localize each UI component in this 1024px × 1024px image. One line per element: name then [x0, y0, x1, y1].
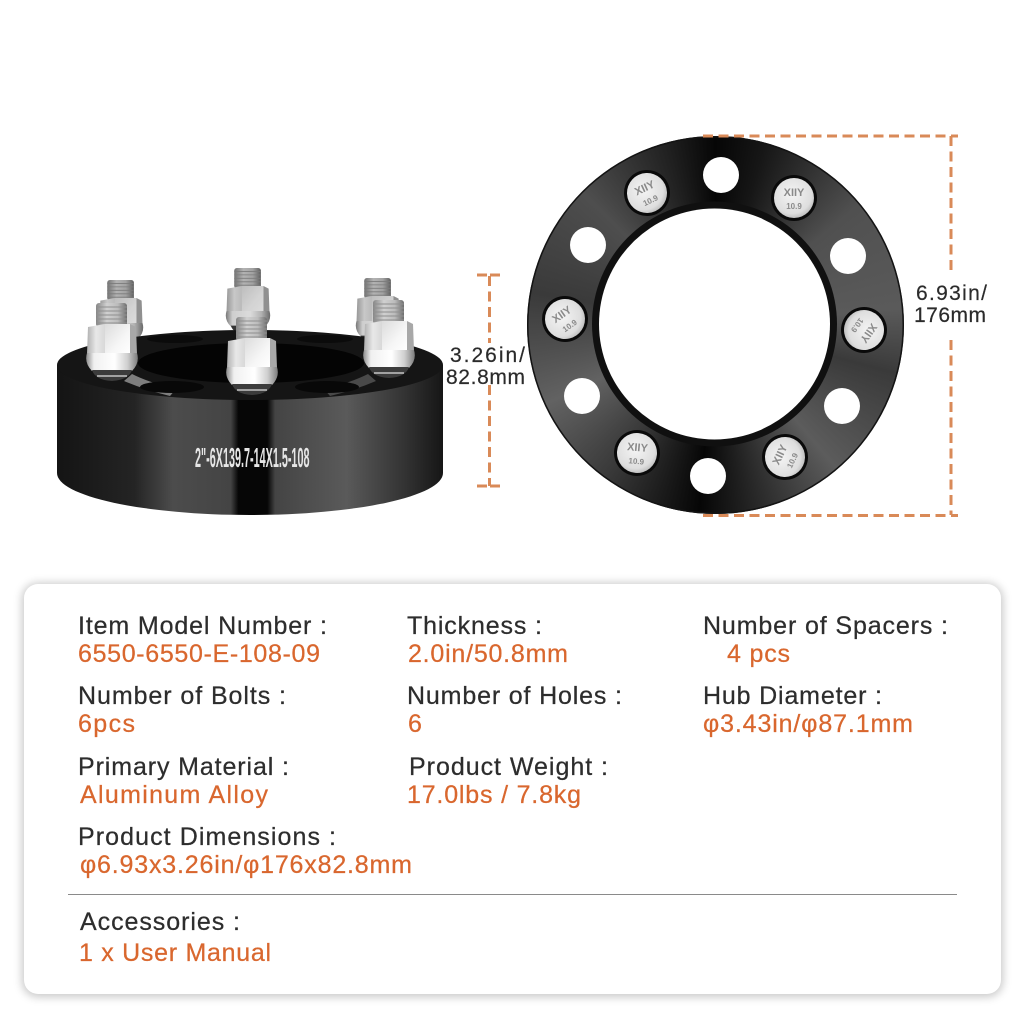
bolts seen from the rear: XIIY	[633, 178, 657, 198]
bolts seen from the rear: 10.9	[849, 316, 865, 335]
spec: number of bolts	[78, 682, 286, 738]
bolts seen from the rear: 10.9	[642, 193, 660, 208]
spec: product weight: 17.0lbs / 7.8kg	[407, 781, 581, 809]
spec: product dimensions	[78, 823, 412, 879]
spec: accessories: 1 x User Manual	[79, 939, 271, 967]
spec: primary material	[78, 753, 289, 809]
bolts seen from the rear: 10.9	[628, 456, 645, 467]
spec: product weight	[407, 753, 608, 809]
front bolts	[86, 300, 415, 395]
dimension: thickness bracket	[477, 275, 502, 486]
spec: number of spacers	[703, 612, 948, 668]
spec: product weight: Product Weight :	[409, 753, 608, 781]
label: diameter dimension: 6.93in/	[916, 282, 987, 305]
spec: primary material: Aluminum Alloy	[80, 781, 268, 809]
spec: number of holes	[407, 682, 622, 738]
bolts seen from the rear: 10.9	[561, 317, 579, 334]
side view: spacer with bolts	[57, 134, 987, 517]
inner hub recess	[592, 202, 837, 446]
spec: thickness: Thickness :	[407, 612, 542, 640]
spec: number of bolts: Number of Bolts :	[78, 682, 286, 710]
bolts seen from the rear: XIIY	[771, 442, 791, 467]
ring body with metallic sheen	[527, 136, 904, 514]
bolts seen from the rear: XIIY	[550, 304, 575, 326]
label: thickness dimension: 3.26in/	[450, 344, 525, 367]
spec: thickness	[407, 612, 568, 668]
spec: number of spacers: 4 pcs	[727, 640, 790, 668]
spec: hub diameter: Hub Diameter :	[703, 682, 882, 710]
engraved size text: 2"-6X139.7-14X1.5-108	[195, 443, 310, 474]
spacer body	[57, 330, 443, 515]
spec: product dimensions: Product Dimensions :	[78, 823, 336, 851]
spec: number of bolts: 6pcs	[78, 710, 135, 738]
spec: accessories: Accessories :	[80, 908, 240, 936]
spec: number of spacers: Number of Spacers :	[703, 612, 948, 640]
bolts seen from the rear: XIIY	[627, 441, 649, 455]
spec: hub diameter	[703, 682, 913, 738]
label: thickness dimension	[446, 344, 525, 389]
bolts seen from the rear: XIIY	[857, 321, 879, 345]
spec: item model number: 6550-6550-E-108-09	[78, 640, 320, 668]
label: diameter dimension	[914, 282, 987, 327]
spec: item model number	[78, 612, 327, 668]
spec: item model number: Item Model Number :	[78, 612, 327, 640]
spec: primary material: Primary Material :	[78, 753, 289, 781]
spec: number of holes: Number of Holes :	[407, 682, 622, 710]
spec: product dimensions: φ6.93x3.26in/φ176x82.8mm	[80, 851, 412, 879]
spec: accessories	[79, 908, 271, 967]
bolts seen from the rear: XIIY	[784, 187, 805, 199]
bolts seen from the rear: 10.9	[786, 202, 802, 211]
open lug holes	[564, 157, 866, 494]
bolts seen from the rear: 10.9	[785, 451, 800, 470]
label: diameter dimension: 176mm	[914, 304, 986, 327]
label: thickness dimension: 82.8mm	[446, 366, 525, 389]
bolts seen from the rear	[533, 162, 896, 488]
spec: thickness: 2.0in/50.8mm	[408, 640, 568, 668]
spec: hub diameter: φ3.43in/φ87.1mm	[703, 710, 913, 738]
front view: spacer ring	[527, 136, 904, 514]
spec: number of holes: 6	[408, 710, 422, 738]
dimension: diameter bracket	[703, 136, 958, 516]
panel: specifications card	[24, 584, 1001, 994]
rear bolts	[99, 268, 400, 347]
